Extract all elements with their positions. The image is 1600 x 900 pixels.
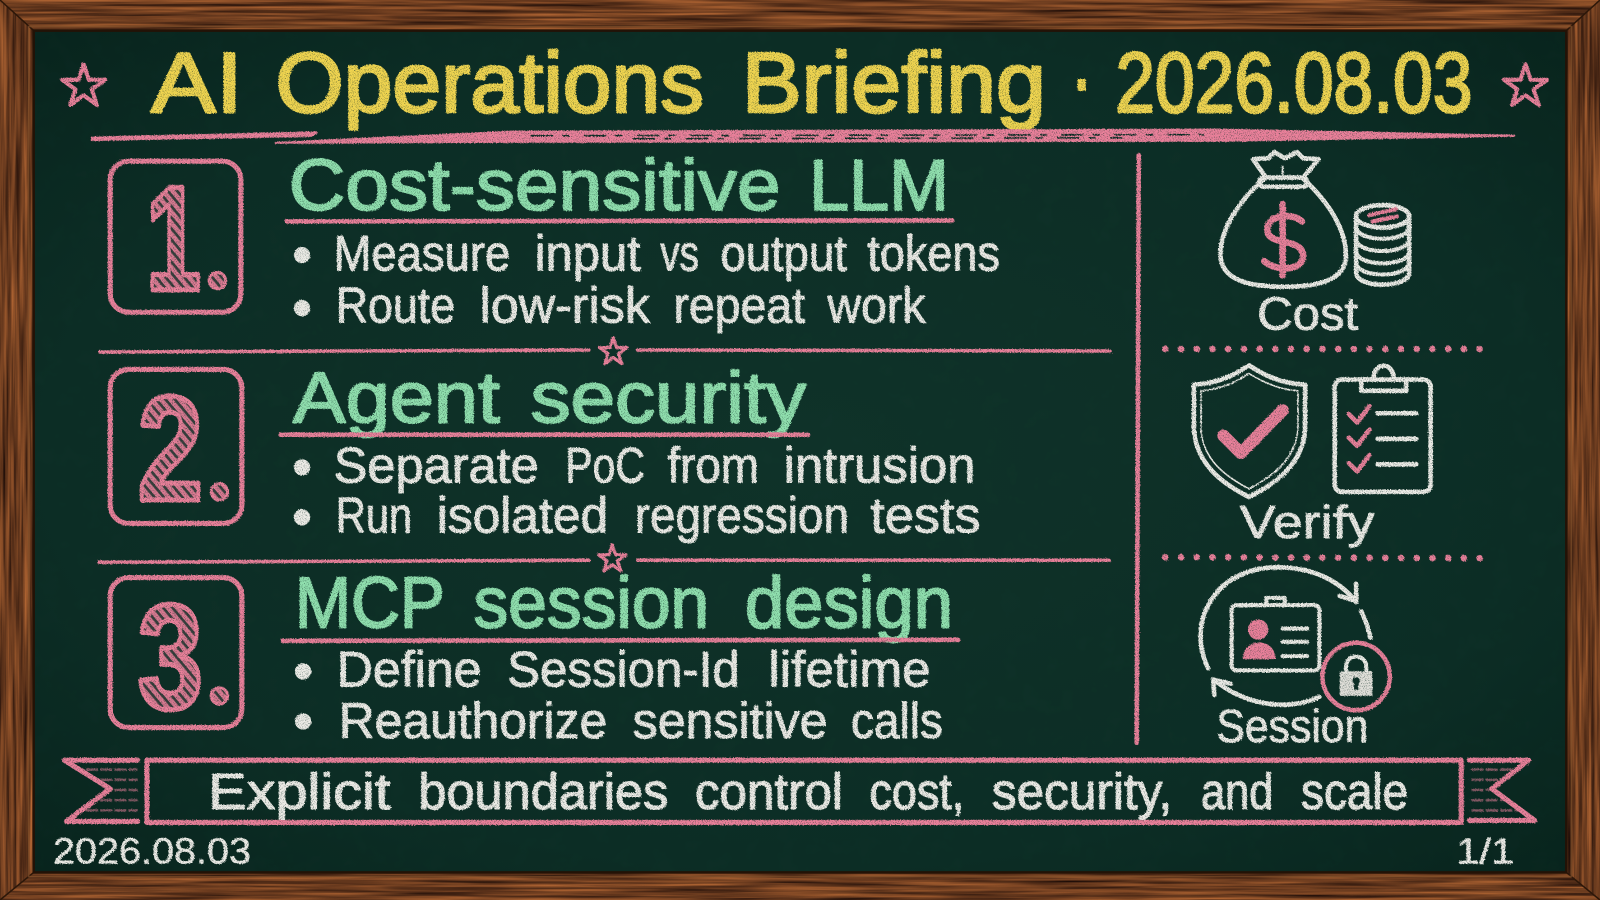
heading 2	[293, 357, 807, 438]
bullets 1: repeat	[673, 277, 805, 333]
banner text: cost,	[869, 763, 964, 820]
bullets 1: tokens	[867, 225, 1000, 281]
title text	[151, 31, 1472, 131]
title text: Operations	[276, 35, 704, 131]
bullets 3	[295, 642, 943, 749]
bullets 1: input	[535, 225, 641, 281]
dotted divider 1	[1165, 346, 1481, 352]
label: cost: Cost	[1257, 288, 1358, 340]
bullets 2: from	[667, 438, 759, 494]
heading 2: Agent	[293, 357, 500, 438]
heading 3	[295, 563, 953, 644]
banner box	[147, 760, 1461, 822]
heading 3: session	[473, 563, 709, 644]
star left	[62, 64, 105, 105]
title text: 2026.08.03	[1115, 35, 1472, 131]
icon: money bag	[1220, 152, 1346, 287]
bullets 3: lifetime	[768, 642, 931, 698]
section 1: cost-sensitive LLM	[110, 145, 1000, 333]
number badge 3: 3	[138, 573, 203, 740]
section 3: MCP session design	[110, 563, 958, 749]
bullets 1: low-risk	[480, 277, 651, 333]
star right	[1504, 64, 1547, 105]
bullets 2: Run	[336, 488, 412, 544]
icon: clipboard checklist	[1335, 366, 1431, 492]
bullets 1: Route	[336, 277, 455, 333]
bullets 2: PoC	[565, 438, 645, 494]
ribbon right	[1469, 760, 1535, 820]
divider 1	[100, 338, 1110, 364]
banner text: control	[695, 763, 843, 820]
banner text: security,	[992, 763, 1172, 820]
bullets 2: Separate	[334, 438, 539, 494]
number badge 2	[110, 365, 242, 532]
heading 3: MCP	[295, 563, 445, 644]
number badge 2: 2	[138, 365, 203, 532]
section 2: agent security	[110, 357, 981, 544]
banner text: and	[1201, 763, 1273, 820]
icon: padlock	[1322, 643, 1390, 710]
heading 1	[289, 145, 949, 226]
bullets 2: regression	[635, 488, 849, 544]
label: session: Session	[1216, 700, 1368, 752]
ribbon left	[64, 760, 138, 821]
icon: shield	[1194, 365, 1305, 497]
divider 2	[99, 545, 1109, 571]
bullets 3: Define	[337, 642, 482, 698]
bullets 3: Session-Id	[507, 642, 740, 698]
panel: cost icon	[1220, 152, 1409, 340]
label: verify: Verify	[1240, 496, 1375, 548]
bullets 2: tests	[870, 488, 981, 544]
heading underline 2	[281, 432, 808, 437]
banner text: scale	[1301, 763, 1408, 820]
panel: verify icon	[1194, 365, 1431, 548]
bullets 1: Measure	[334, 225, 510, 281]
bullets 1: work	[827, 277, 926, 333]
title	[62, 31, 1547, 143]
bullets 3: Reauthorize	[339, 693, 607, 749]
dotted divider 2	[1165, 557, 1481, 558]
title text: AI	[151, 35, 243, 131]
bullets 1: output	[720, 225, 847, 281]
banner text	[208, 763, 1408, 820]
icon: session cycle arrows	[1201, 567, 1370, 705]
icon: id card	[1232, 598, 1319, 670]
heading 2: security	[531, 357, 807, 438]
heading 3: design	[745, 563, 953, 644]
banner	[64, 760, 1535, 822]
bullets 3: sensitive	[633, 693, 828, 749]
vertical divider	[1137, 155, 1139, 743]
number badge 3	[110, 573, 242, 740]
bullets 1: vs	[660, 225, 699, 281]
heading underline 3	[283, 640, 958, 641]
banner text: boundaries	[418, 763, 668, 820]
bullets 2	[294, 438, 981, 544]
banner text: Explicit	[208, 763, 391, 820]
heading underline 1	[287, 220, 952, 221]
heading 1: Cost-sensitive	[289, 145, 781, 226]
title underline	[92, 130, 1514, 143]
bullets 2: isolated	[437, 488, 608, 544]
bullets 1	[294, 225, 1000, 333]
panel: session icon	[1201, 567, 1390, 752]
footer date: 2026.08.03	[53, 831, 251, 871]
page number: 1/1	[1456, 831, 1514, 871]
bullets 3: calls	[851, 693, 943, 749]
bullets 2: intrusion	[784, 438, 976, 494]
heading 1: LLM	[809, 145, 949, 226]
number badge 1	[110, 155, 241, 322]
icon: coin stack	[1356, 205, 1409, 285]
title text: Briefing	[742, 35, 1046, 131]
number badge 1: 1	[146, 155, 201, 322]
title text: ·	[1070, 31, 1093, 127]
